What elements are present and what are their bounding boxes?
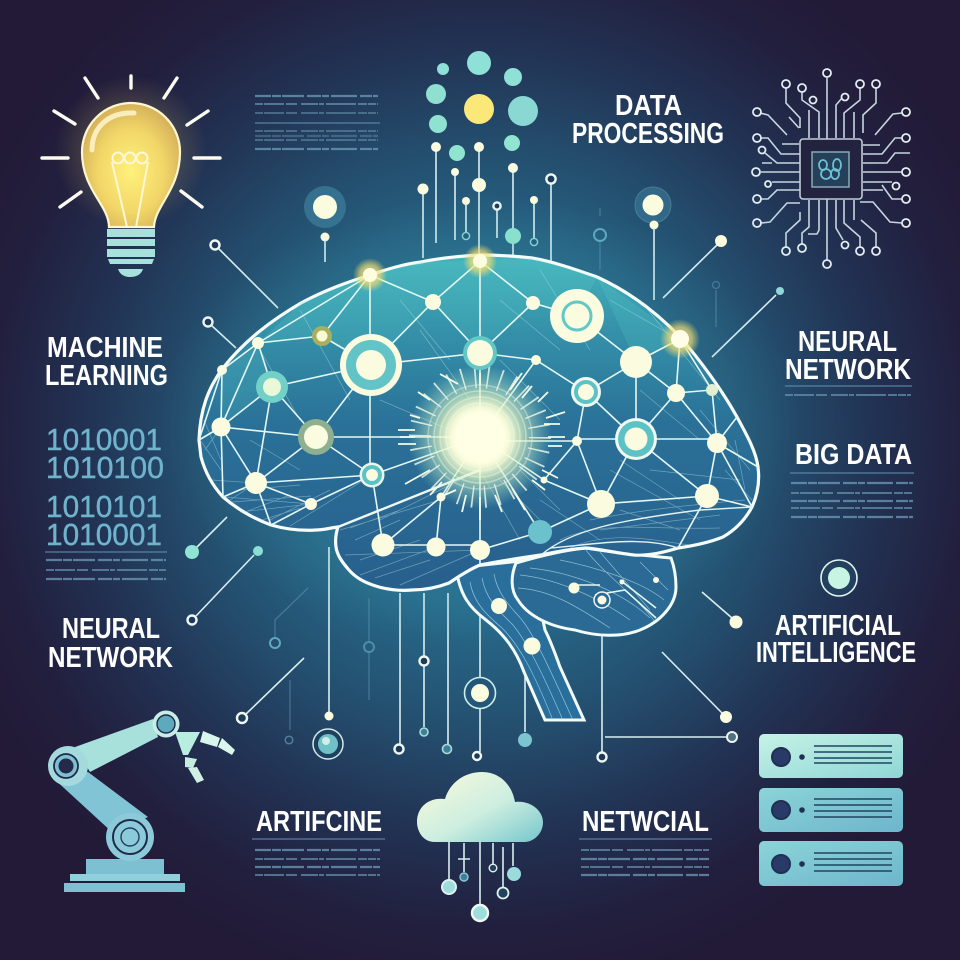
caption block top — [255, 96, 380, 149]
vertical pins — [418, 142, 606, 270]
teal node — [528, 520, 552, 544]
shoulder joint — [48, 746, 88, 786]
ringed nodes — [256, 289, 657, 488]
brain illustration — [160, 195, 800, 720]
label: neural network right: NETWORK — [785, 354, 911, 386]
binary digits: 1010001 — [46, 517, 162, 552]
label: neural network right — [785, 326, 912, 395]
binary digits: 1010101 — [46, 489, 162, 524]
cerebellum — [512, 548, 676, 635]
brain glow halo — [160, 195, 800, 645]
label: neural network left: NEURAL — [62, 613, 160, 645]
label: data processing: DATA — [615, 90, 682, 122]
binary digits: 1010100 — [46, 450, 164, 485]
lighter top facets — [221, 258, 680, 427]
halo node right — [635, 187, 671, 300]
halo node left — [304, 186, 346, 262]
binary digits — [46, 422, 164, 552]
base joint — [106, 813, 154, 861]
chip traces — [760, 78, 910, 260]
diagonal connectors — [204, 235, 784, 357]
panel: server row two — [759, 788, 903, 832]
brain stem — [456, 560, 584, 720]
chip pads — [752, 69, 910, 268]
icon: cloud — [417, 772, 543, 921]
wrist joint — [152, 710, 180, 738]
label: artifcine: ARTIFCINE — [256, 806, 382, 838]
label: machine learning — [45, 332, 168, 392]
brain cortex outline — [199, 255, 759, 590]
central glow burst — [398, 365, 565, 520]
label: big data: BIG DATA — [795, 439, 912, 471]
label: neural network left — [48, 613, 173, 674]
gripper — [175, 731, 235, 783]
icon: light bulb — [42, 76, 220, 277]
sphere node — [313, 729, 343, 759]
label: data processing — [572, 90, 724, 150]
icon: ring node — [821, 560, 857, 596]
cloud body — [417, 772, 543, 842]
chip body — [800, 139, 862, 199]
bulb highlight — [92, 113, 134, 150]
chip core glyph — [819, 159, 841, 179]
label: netwcial: NETWCIAL — [582, 806, 709, 838]
connector lines and nodes above the brain — [204, 51, 784, 357]
neural network edges — [199, 261, 758, 565]
icon: robot arm — [48, 710, 235, 892]
arm base — [64, 859, 185, 892]
panel: server row three — [759, 841, 903, 886]
bulb rays — [42, 76, 220, 207]
binary digits: 1010001 — [46, 422, 162, 457]
ring node below stem — [464, 678, 496, 708]
label: data processing: PROCESSING — [572, 118, 724, 150]
cloud drops — [449, 842, 513, 904]
icon: processor chip — [752, 69, 910, 268]
connector lines and nodes below the brain — [185, 517, 742, 762]
label: machine learning: LEARNING — [45, 360, 168, 392]
plain nodes — [212, 294, 727, 654]
label: neural network right: NEURAL — [798, 326, 897, 358]
label: artifcine — [252, 806, 385, 875]
lower fold band — [338, 470, 480, 527]
upper arm — [75, 719, 158, 772]
panel: server row one — [759, 734, 903, 778]
data dots cluster — [426, 51, 538, 161]
chip core — [812, 152, 849, 187]
glowing nodes — [312, 244, 700, 359]
bulb screw base — [107, 229, 155, 277]
cortex texture strands — [200, 270, 752, 585]
bulb filament — [112, 152, 148, 227]
label: big data — [790, 439, 914, 517]
bulb glass — [82, 103, 180, 227]
label: machine learning: MACHINE — [47, 332, 163, 364]
caption under binary — [45, 552, 167, 579]
label: neural network left: NETWORK — [48, 642, 173, 674]
lower arm — [52, 772, 148, 833]
label: netwcial — [579, 806, 712, 875]
label: artificial intelligence — [756, 610, 916, 669]
label: artificial intelligence: ARTIFICIAL — [775, 610, 901, 642]
